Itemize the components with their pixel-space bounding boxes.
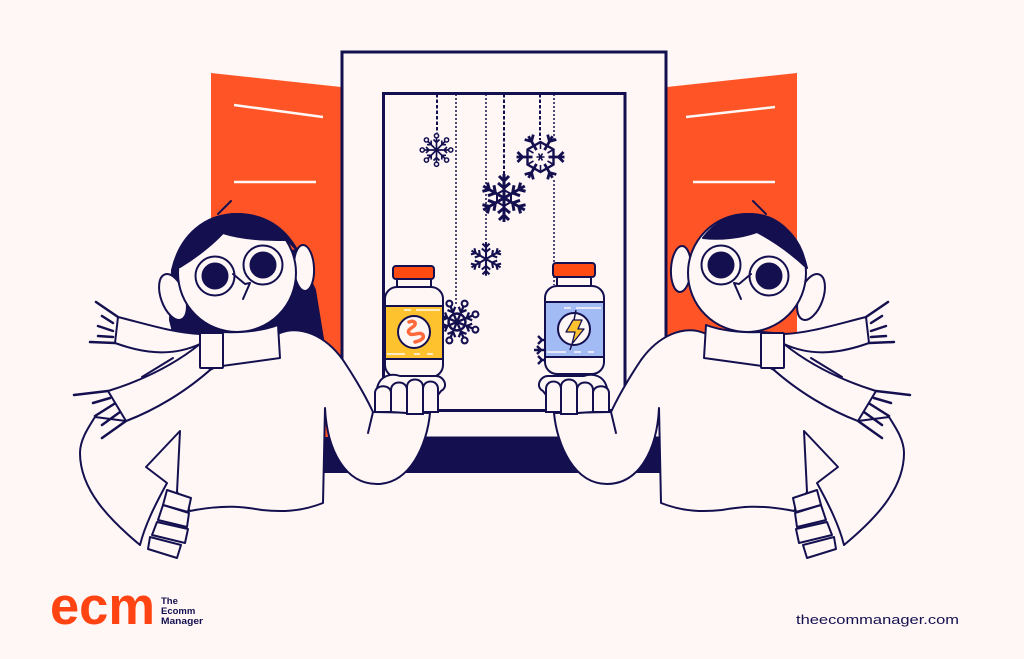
neck scarf (704, 325, 784, 368)
snowflake 6 behind right bottle (534, 336, 547, 364)
snowflake 1 (420, 134, 453, 166)
scarf upper end (784, 302, 894, 352)
glasses (196, 201, 282, 299)
right person (554, 201, 910, 558)
logo wordmark: Ecomm (161, 606, 195, 617)
yellow label (385, 306, 443, 359)
arm crease (611, 412, 616, 433)
window sill (324, 437, 661, 473)
sleeve fingers (793, 490, 836, 558)
scarf lower end (74, 344, 210, 438)
hanging strings (437, 94, 554, 305)
right hand (539, 375, 609, 414)
scarf upper end (90, 302, 200, 352)
blue label (545, 302, 604, 357)
icon: intestine (398, 316, 430, 348)
window frame (342, 52, 666, 438)
logo wordmark: Manager (161, 616, 203, 627)
glasses (702, 201, 788, 299)
sleeve fingers (148, 490, 191, 558)
snowflake 4 small (469, 242, 503, 276)
head (688, 214, 806, 332)
logo (50, 577, 203, 636)
head (178, 214, 296, 332)
snowflake 2 hexagon (516, 134, 564, 180)
logo wordmark (161, 596, 203, 627)
body (385, 287, 443, 377)
icon: lightning bolt (558, 310, 590, 350)
snowflake 5 behind left bottle (427, 292, 487, 352)
scarf lower end (774, 344, 910, 438)
left bottle: gut health (385, 266, 443, 377)
mirrored sweater, arms and scarf (554, 302, 910, 558)
logo mark: ecm (50, 577, 155, 636)
website url: theecommanager.com (796, 612, 959, 627)
neck (557, 277, 591, 286)
body (545, 286, 604, 374)
snowflake 3 large (480, 174, 528, 222)
ears (670, 246, 830, 324)
right orange shutter (667, 73, 797, 340)
neck scarf (200, 325, 280, 368)
logo wordmark: The (161, 596, 178, 607)
left hand (375, 375, 445, 414)
ears (154, 245, 315, 324)
sweater (554, 330, 904, 545)
long hair (170, 250, 324, 345)
sweater (80, 330, 430, 545)
arm crease (368, 412, 373, 433)
cap (393, 266, 434, 279)
left person (74, 201, 430, 558)
neck (397, 279, 431, 288)
right bottle: energy (545, 263, 604, 374)
cap (553, 263, 595, 277)
left orange shutter (211, 73, 341, 437)
fringe (172, 214, 297, 270)
fringe (703, 214, 807, 268)
